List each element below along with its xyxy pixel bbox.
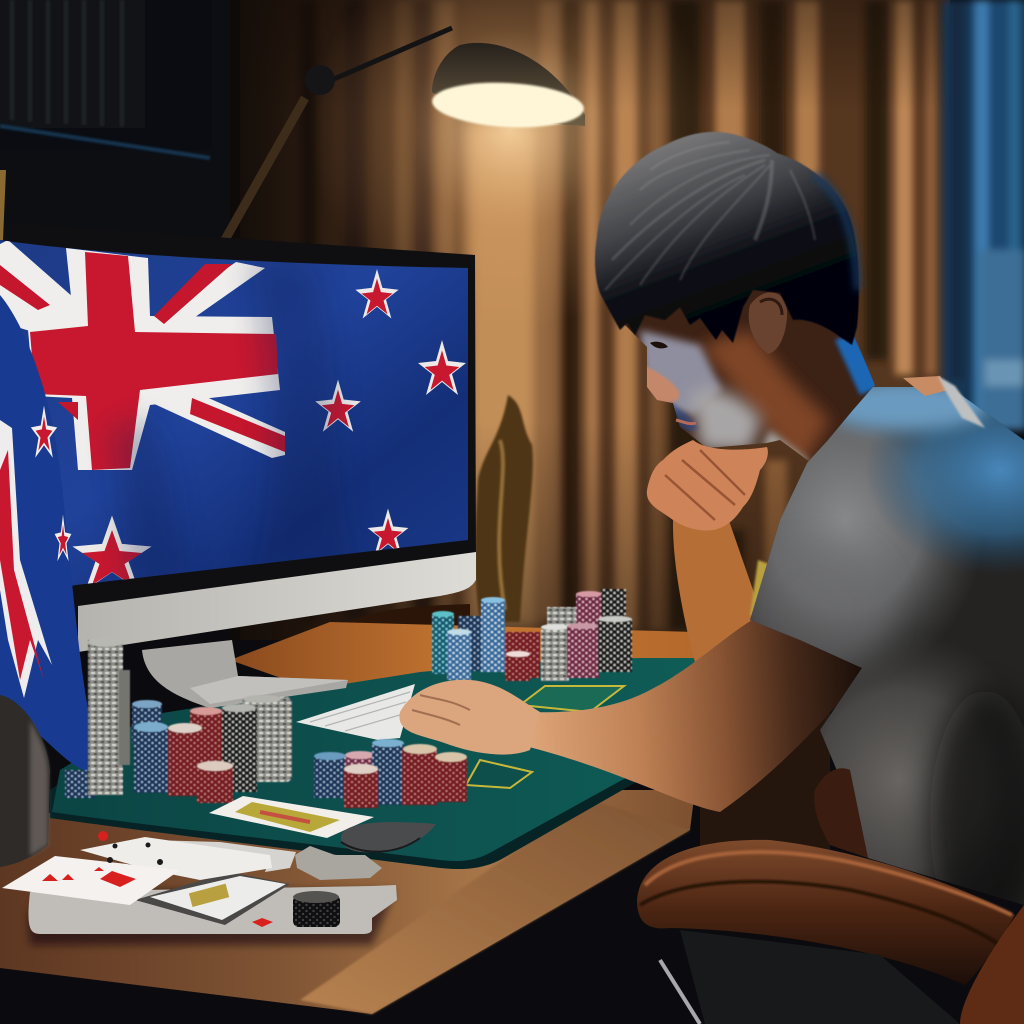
monitor chin [78, 552, 476, 652]
neck and head skin [624, 290, 875, 461]
hand at chin [647, 440, 768, 531]
hand on mat [399, 680, 540, 755]
main arm [525, 620, 868, 812]
forearm to chin [673, 515, 760, 680]
back collar [903, 376, 948, 396]
green poker mat [50, 658, 706, 869]
lips [676, 420, 696, 424]
chip stacks far [432, 589, 632, 681]
loose chips pile [295, 846, 382, 880]
pen holder [0, 695, 50, 867]
lamp glow [310, 0, 710, 330]
keyboard [296, 684, 415, 740]
mouse [341, 822, 436, 852]
monitor stand [142, 640, 348, 708]
stars [72, 269, 466, 590]
hair [595, 132, 859, 345]
hair blue rim [815, 175, 858, 290]
curtains [230, 0, 950, 850]
eye [650, 342, 668, 348]
chip stacks left [65, 637, 292, 803]
hair strands [605, 142, 815, 290]
table markings [520, 686, 624, 712]
shirt [750, 387, 1024, 905]
side flag [0, 170, 95, 772]
desk front surface [0, 790, 695, 1014]
person [399, 132, 1024, 950]
tablet and cards pile [2, 831, 397, 945]
desk back surface [230, 622, 696, 720]
chip stacks centre [314, 739, 467, 808]
desk lamp [222, 28, 585, 245]
screen flag [0, 240, 468, 586]
union jack white diagonals [0, 240, 74, 330]
monitor [0, 222, 480, 652]
office chair [637, 768, 1024, 1024]
desk lit edge [300, 800, 690, 1014]
black chip [293, 891, 340, 927]
bookshelf [0, 0, 250, 240]
union jack red diagonals [0, 265, 50, 310]
union jack white cross [28, 248, 280, 470]
blue window curtain [942, 0, 1024, 430]
ear [749, 292, 787, 354]
playing card on mat [209, 796, 374, 838]
flag wave shading [250, 260, 360, 590]
statue [342, 395, 533, 644]
union jack red cross [30, 252, 278, 470]
